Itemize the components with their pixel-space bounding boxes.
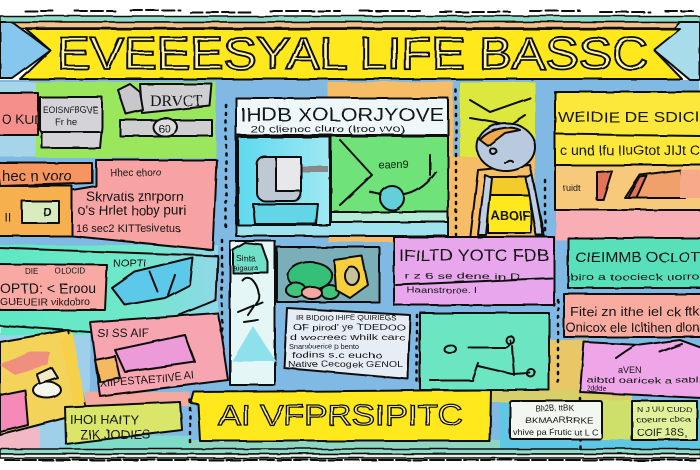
panel: pink note [0,264,107,310]
bottom yellow banner [191,390,491,441]
panel: orange chart strip: ruidt [563,183,581,193]
panel: grey note card: Fr he [55,117,77,128]
panel: lower-left yellow sketch [0,330,85,435]
panel: white column with triangle: Sinta [236,253,256,263]
panel: pink sketch panel: XIIPESTAETIIVE AI [99,370,195,390]
sign: ABOIF [491,209,530,223]
panel: pink sketch panel [90,313,228,396]
panel: white text card: d wecreec whilk carc [290,333,405,342]
panel: white column with triangle [230,241,276,385]
panel: central illustrated panel [236,98,448,236]
panel: white column with triangle: aigaura [233,263,259,272]
panel: pink sketch panel: SI SS AIF [97,326,149,340]
panel: lilac text panel: r z 6 se dene in D [405,272,520,281]
panel: pink note: GUEUEIR vikdobro [0,297,90,308]
panel: orange box: II [5,211,12,225]
panel: white text card lower right [510,401,602,439]
panel: teal heading [568,238,700,288]
panel: orange box: D [43,205,52,219]
sign [488,195,531,233]
label: hand and title [118,84,212,114]
panel: yellow-green note lower right: coeure cbca [636,415,692,424]
panel: white text card: fodins s.c eucho [292,351,383,360]
panel: orange chart strip [555,165,700,210]
panel: yellow-green label: IHOI HAITY [70,412,139,427]
background colour patches [0,80,700,452]
title banner [20,28,682,79]
panel: yellow-green label [65,402,182,444]
panel: yellow text block: WEIDIE DE SDICI [558,110,700,126]
ink speckles [190,90,580,450]
panel: orange box [0,186,72,236]
panel: white text card lower right: BKMAARRRKE [525,415,593,425]
panel heading [236,98,448,135]
panel: yellow-green label: ZIK JODIES [80,427,151,442]
label: hand and title: DRVCT [150,93,203,110]
banner text: AI VFPRSIPITC [218,400,463,432]
panel: teal callout: NOPTI [113,258,147,270]
illustration: computer [238,137,330,225]
panel: salmon text: Fitei zn ithe iel ck ftk [570,304,700,319]
panel: pink sketch note [580,340,700,398]
panel: white text card lower right: Bh2B, ttBK [535,404,575,413]
panel: pink text block: Skrvatis znrporn [86,189,184,204]
title text: EVEEESYAL LIFE BASSC [57,28,648,79]
grey bar with circle [120,118,212,136]
panel: white text card: Native Cecogek GENOL [288,360,404,369]
panel: lilac text panel [394,237,554,305]
panel: white text card [284,308,410,379]
panel heading: IHDB XOLORJYOVE [240,105,444,125]
top frame [0,10,700,28]
panel: pink note: OPTD: < Eroou [0,280,96,296]
panel: teal callout [0,248,218,335]
illustration: green map [331,136,448,222]
panel: pink note: DIE [25,267,38,276]
right ribbon end [654,22,700,80]
panel: top-left pink note [0,93,43,135]
panel: white text card lower right: vhive pa Frutic ut L C [513,427,598,437]
diagram line [430,340,530,380]
grey bar with circle: 60 [158,123,170,135]
panel: yellow-green note lower right [632,401,697,440]
panel: pink text block: 16 sec2 KITTesivetus [76,223,181,235]
panel: white text card: Snarubuerice p bento [289,342,359,351]
panel: lilac text panel: Haanstroroe. I [407,286,477,295]
panel: yellow text block [555,92,700,165]
panel: grey note card: EOISNFBGVE [43,105,98,116]
panel: yellow-green note lower right: COIF 18S, [637,427,687,439]
panel: white text card: IR BIDOIO IHIFE QUIRIEGS [296,313,396,322]
bottom frame [0,449,700,460]
panel: white text card: OF pirod' ye TDEDOO [293,323,405,332]
illustration: green map: eaen9 [378,159,409,171]
panel: pink text block: Hhec ehoro [110,168,162,179]
panel: pink sketch note: aibtd oaricek a sabl [587,375,699,385]
panel: orange heading strip [0,163,92,186]
panel: lilac text panel: IFILTD YOTC FDB [399,246,549,265]
panel: green diagram [420,313,549,390]
panel: salmon text [564,294,700,337]
panel: pink sketch note: 2ddde [587,386,607,393]
panel: yellow-green note lower right: N J UU CUDD [637,405,693,414]
panel: pink sketch note: aVEN [618,365,642,375]
panel: orange heading strip: hec n voro [2,168,72,185]
panel: pink note: OLOCID [55,267,86,276]
left ribbon end [0,22,50,78]
panel: teal heading: biro a toocieck uorro [570,272,700,283]
panel: salmon text: Onicox ele Icltihen dlon [566,321,700,335]
illustration: person with sign [470,98,545,240]
panel: top-left pink note: O KUD [2,112,43,127]
panel: yellow text block: c und Ifu IIuGtot JIJt C [560,143,700,158]
panel: grey note card [40,97,102,148]
panel: teal heading: CIEIMMB OCLOT [575,249,700,266]
panel heading: 20 clienoc cluro (Iroo vvo) [250,124,405,135]
panel: pink text block [72,160,217,250]
panel: flower illustration [277,247,379,302]
panel: pink text block: o's Hrlet hoby puri [78,203,186,218]
